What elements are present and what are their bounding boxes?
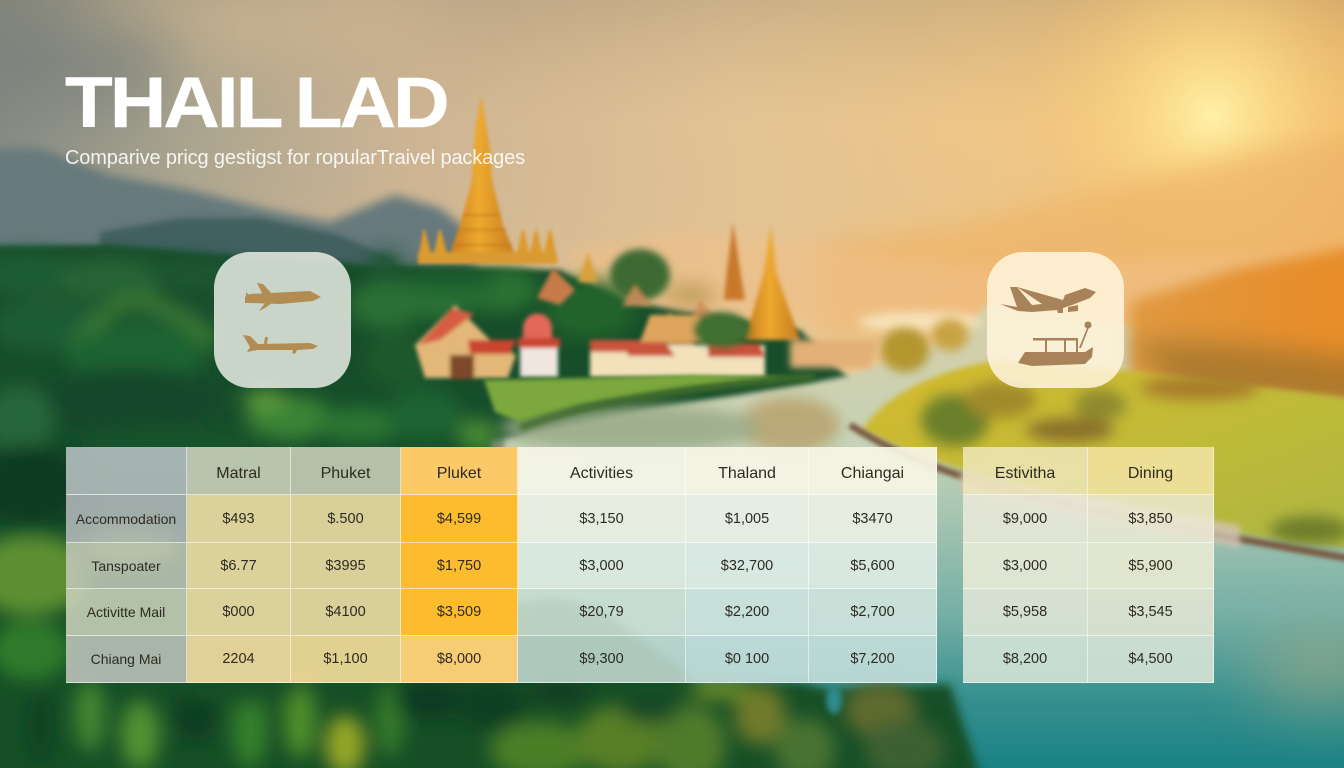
table: main price comparison: Phuket xyxy=(321,465,370,482)
table: main price comparison: Chiang Mai xyxy=(91,651,161,667)
column: Dining xyxy=(1088,447,1214,683)
right bank: hills and fields xyxy=(850,248,1344,575)
column: Phuket xyxy=(291,447,401,683)
table: main price comparison: Matral xyxy=(216,465,261,482)
table: main price comparison: $9,300 xyxy=(579,651,624,667)
table: main price comparison: 2204 xyxy=(222,651,255,667)
table: main price comparison: $32,700 xyxy=(721,558,773,574)
main golden pagoda xyxy=(418,95,557,264)
icon: two planes glass tile xyxy=(214,252,351,388)
forest and hills xyxy=(0,245,860,768)
table: main price comparison: $0 100 xyxy=(725,651,769,667)
table: main price comparison: Activitte Mail xyxy=(87,604,165,620)
table: secondary price comparison: $5,900 xyxy=(1128,558,1173,574)
table: main price comparison: $2,700 xyxy=(850,604,895,620)
foreground trees xyxy=(0,525,988,768)
table: main price comparison xyxy=(66,447,937,683)
table: secondary price comparison: $4,500 xyxy=(1128,651,1173,667)
table: secondary price comparison: Estivitha xyxy=(995,465,1055,482)
distant mountains xyxy=(0,135,1344,330)
icon: airliner xyxy=(1000,287,1096,313)
table: main price comparison: Accommodation xyxy=(76,510,176,526)
table: main price comparison: $.500 xyxy=(327,510,364,526)
table: main price comparison: $4,599 xyxy=(437,510,481,526)
table: main price comparison: $3,150 xyxy=(579,510,624,526)
table: secondary price comparison: $3,545 xyxy=(1128,604,1173,620)
table: main price comparison: $2,200 xyxy=(725,604,769,620)
table: secondary price comparison: $5,958 xyxy=(1003,604,1047,620)
icon: upper plane xyxy=(245,283,321,311)
table: main price comparison: $1,100 xyxy=(323,651,368,667)
table: secondary price comparison: Dining xyxy=(1128,465,1173,482)
table: main price comparison: $1,005 xyxy=(725,510,769,526)
temple cluster and village xyxy=(415,222,880,379)
column: Matral xyxy=(187,447,291,683)
river xyxy=(470,305,1344,768)
table: secondary price comparison: $3,850 xyxy=(1128,510,1173,526)
icon: plane and boat glass tile xyxy=(987,252,1124,388)
table: main price comparison: $6.77 xyxy=(220,558,257,574)
table: main price comparison: $493 xyxy=(222,510,255,526)
column: Thaland xyxy=(686,447,809,683)
table: main price comparison: $1,750 xyxy=(437,558,481,574)
column: Chiangai xyxy=(809,447,937,683)
table: main price comparison: $3,509 xyxy=(437,604,481,620)
table: main price comparison: $8,000 xyxy=(437,651,481,667)
table: main price comparison: $5,600 xyxy=(850,558,895,574)
table: main price comparison: Thaland xyxy=(718,465,776,482)
table: secondary price comparison xyxy=(963,447,1214,683)
table: main price comparison: $20,79 xyxy=(579,604,624,620)
column: Activities xyxy=(518,447,686,683)
title: THAIL LAD xyxy=(65,64,447,143)
table: secondary price comparison: $8,200 xyxy=(1003,651,1047,667)
table: main price comparison: $3995 xyxy=(325,558,366,574)
subtitle: Comparive pricg gestigst for ropularTraivel packages xyxy=(65,147,525,169)
column: Phuket highlighted xyxy=(401,447,518,683)
table: main price comparison: $000 xyxy=(222,604,255,620)
table: main price comparison: Pluket xyxy=(437,465,481,482)
table: main price comparison: Tanspoater xyxy=(91,558,161,574)
icon: long-tail boat xyxy=(1018,322,1093,366)
table: main price comparison: $3470 xyxy=(852,510,893,526)
table: main price comparison: Chiangai xyxy=(841,465,904,482)
riverbank lawn xyxy=(484,375,790,422)
table: main price comparison: Activities xyxy=(570,465,633,482)
column: Estivitha xyxy=(963,447,1088,683)
icon: lower plane xyxy=(243,335,318,354)
sky xyxy=(0,0,1344,420)
table: secondary price comparison: $3,000 xyxy=(1003,558,1047,574)
column: row labels xyxy=(66,447,187,683)
table: main price comparison: $4100 xyxy=(325,604,366,620)
table: secondary price comparison: $9,000 xyxy=(1003,510,1047,526)
table: main price comparison: $7,200 xyxy=(850,651,895,667)
table: main price comparison: $3,000 xyxy=(579,558,624,574)
